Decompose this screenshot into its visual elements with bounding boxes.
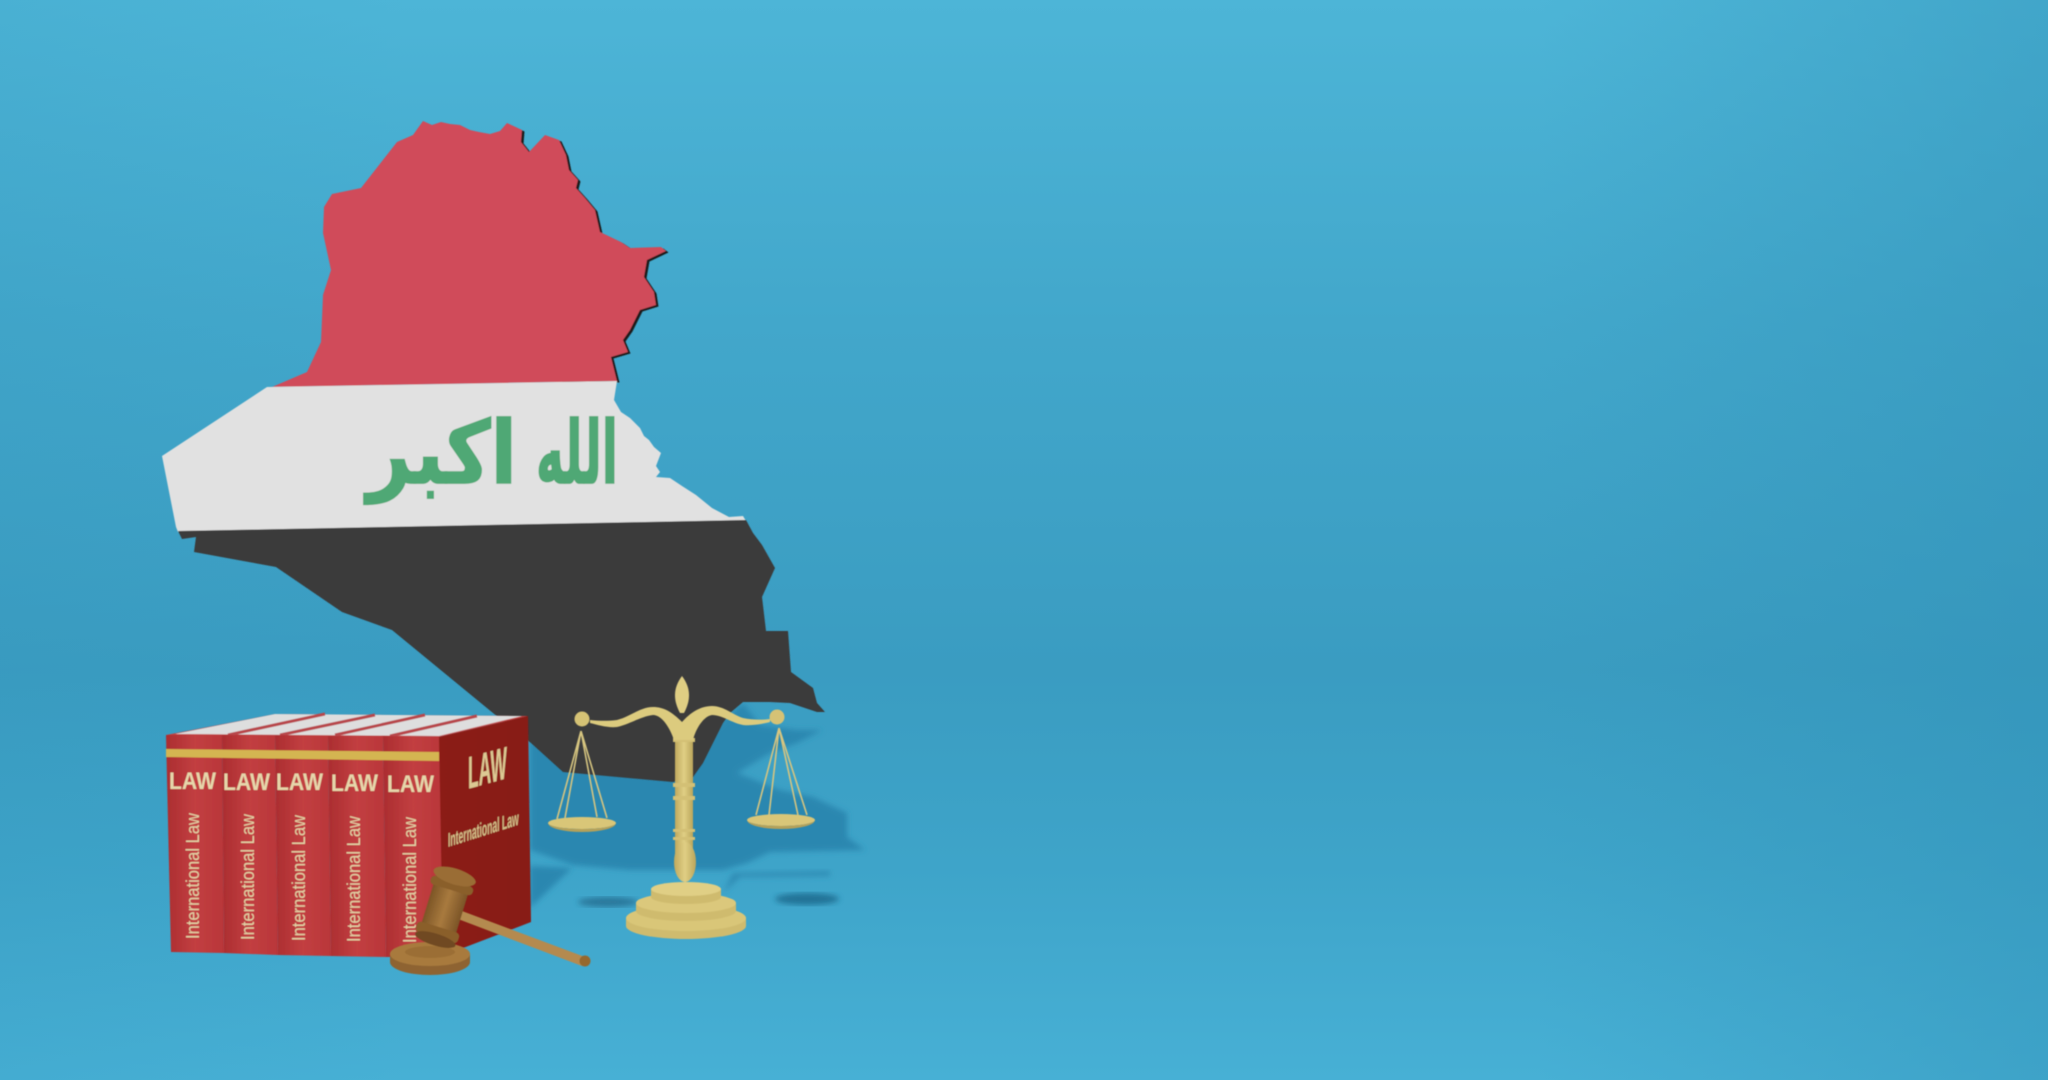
gavel sound block (390, 942, 470, 975)
book spines: LAW (276, 769, 323, 796)
book spines: International Law (183, 812, 203, 939)
book spines (166, 735, 443, 957)
flag band: black (178, 520, 825, 782)
side label International Law: International Law (448, 808, 519, 852)
book spines: International Law (289, 814, 309, 941)
law books (166, 714, 531, 957)
gavel (390, 862, 590, 975)
gold band (166, 749, 439, 761)
map extrusion edge (502, 124, 668, 382)
flag inscription: الله (536, 402, 618, 504)
book spines: LAW (387, 771, 434, 798)
scale base (626, 882, 746, 939)
cast shadows (530, 703, 865, 908)
book spines: LAW (169, 768, 216, 795)
map of Iraq with flag (162, 121, 825, 782)
book side cover (439, 716, 531, 957)
book spines: International Law (344, 815, 364, 942)
book spines: International Law (400, 816, 420, 943)
scale left pan (548, 712, 616, 832)
gavel handle (458, 911, 585, 966)
book spines: LAW (223, 769, 270, 796)
scale finial (675, 676, 689, 713)
flag inscription: اكبر (363, 402, 517, 505)
scale beam (590, 706, 770, 740)
book spines: LAW (331, 770, 378, 797)
scale column (673, 738, 696, 882)
gavel head (413, 862, 478, 952)
book spines: International Law (238, 813, 258, 940)
balance scale (548, 676, 815, 939)
book page tops (166, 714, 528, 737)
side label LAW: LAW (468, 737, 507, 800)
flag band: red (272, 121, 666, 387)
flag band: white (162, 381, 746, 532)
scale right pan (747, 710, 815, 829)
flag inscription (363, 402, 618, 505)
